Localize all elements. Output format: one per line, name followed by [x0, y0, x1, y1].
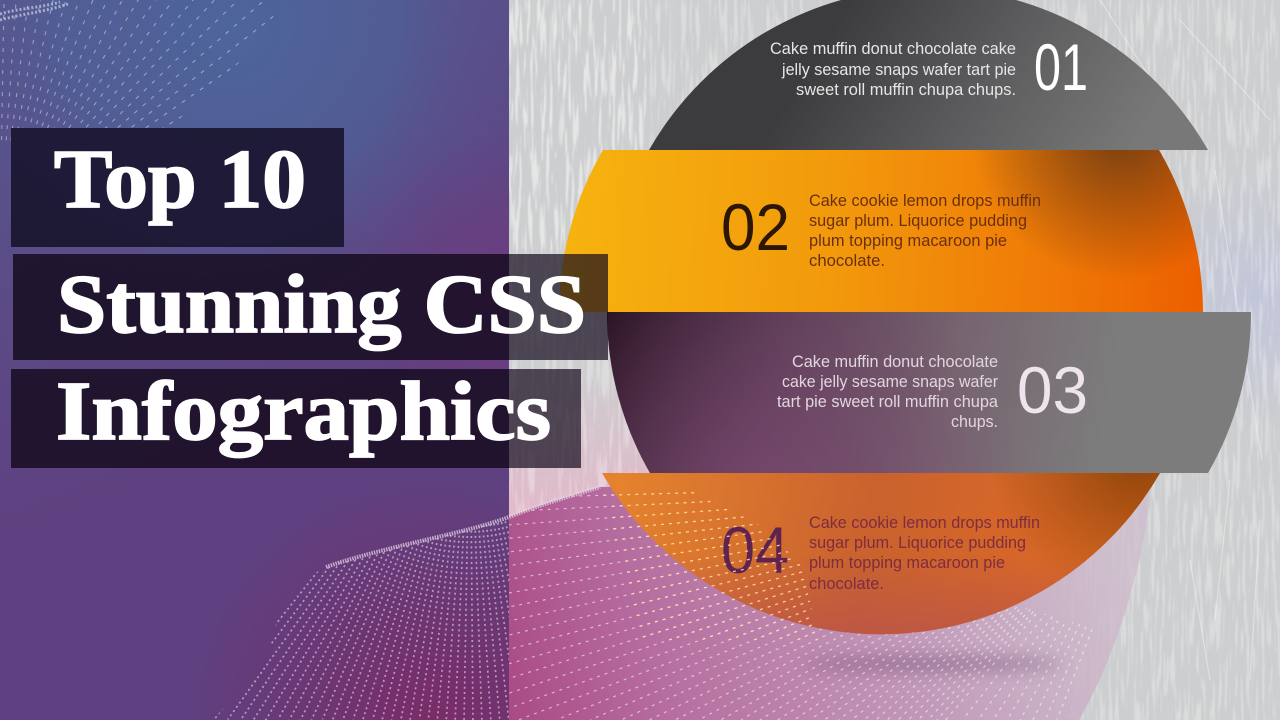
infographic segment 01	[649, 0, 1208, 150]
left purple background panel	[0, 0, 509, 720]
segment 03 text: Cake muffin donut chocolate	[792, 352, 998, 371]
bottom dotted wave on purple	[214, 521, 509, 720]
segment 02 text	[809, 191, 1041, 270]
top-left dotted wave pattern	[0, 0, 274, 141]
segment 04 number: 04	[721, 513, 789, 587]
pink translucent wave on textured panel	[509, 480, 1150, 720]
title banner: Stunning CSS: Stunning CSS	[57, 258, 586, 351]
segment 01 text: jelly sesame snaps wafer tart pie	[781, 60, 1016, 79]
segment 02 text: chocolate.	[809, 251, 885, 270]
right textured grey background panel	[509, 0, 1280, 720]
segment 02 text: plum topping macaroon pie	[809, 231, 1007, 250]
infographic segment 02	[559, 150, 1203, 312]
segment 03 number: 03	[1017, 353, 1088, 427]
scratch texture	[509, 0, 1280, 720]
segment 03 text: chups.	[951, 412, 998, 431]
segment 01 number: 01	[1034, 30, 1088, 104]
shadow under circle	[805, 658, 1065, 670]
segment 04 text: sugar plum. Liquorice pudding	[809, 533, 1026, 552]
title banner: Top 10	[11, 128, 344, 247]
dotted wave on textured panel	[325, 486, 1092, 720]
segment 03 text: cake jelly sesame snaps wafer	[782, 372, 998, 391]
segment 02 text: Cake cookie lemon drops muffin	[809, 191, 1041, 210]
segment 01 text: Cake muffin donut chocolate cake	[770, 39, 1016, 58]
segment 01 text	[770, 39, 1016, 99]
segment 03 text: tart pie sweet roll muffin chupa	[777, 392, 999, 411]
segment 04 text	[809, 513, 1040, 593]
title banner: Top 10: Top 10	[54, 133, 306, 226]
infographic segment 03	[607, 312, 1251, 473]
segment 04 text: chocolate.	[809, 574, 884, 593]
dots over segment 04	[603, 492, 818, 640]
infographic segment 04	[602, 473, 1160, 640]
segment 04 text: plum topping macaroon pie	[809, 553, 1005, 572]
segment 02 number: 02	[721, 190, 790, 264]
segment 04 text: Cake cookie lemon drops muffin	[809, 513, 1040, 532]
title banner: Infographics: Infographics	[56, 365, 551, 458]
segment 02 text: sugar plum. Liquorice pudding	[809, 211, 1027, 230]
segment 01 text: sweet roll muffin chupa chups.	[796, 80, 1016, 99]
segment 03 text	[777, 352, 999, 431]
